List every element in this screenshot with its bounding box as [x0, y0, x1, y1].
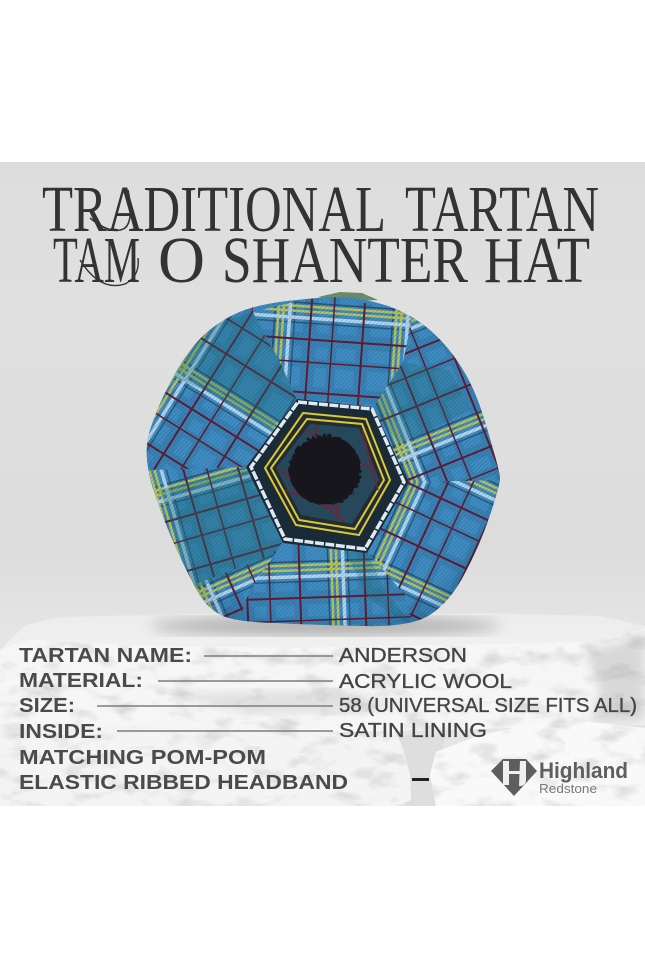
- spec labels: ELASTIC RIBBED HEADBAND: [19, 771, 348, 794]
- rock side shading: [585, 630, 645, 724]
- hat shadow: [150, 617, 500, 635]
- logo: Highland Redstone: [491, 758, 628, 796]
- title: [42, 173, 599, 297]
- logo: Highland Redstone: Redstone: [539, 781, 597, 796]
- logo: Highland Redstone: Highland: [539, 758, 628, 783]
- panel: upper left: [143, 300, 297, 470]
- panel: bottom teal shade: [345, 552, 410, 623]
- infographic canvas: [0, 162, 645, 806]
- panel: lower left: [140, 467, 283, 590]
- title: TRADITIONAL: [42, 173, 386, 246]
- gap between rocks: [395, 735, 445, 806]
- upper rock cliff: [0, 628, 645, 740]
- spec labels: SIZE:: [19, 694, 75, 717]
- hat edge shading: [140, 290, 505, 630]
- panel: top right: [373, 312, 505, 482]
- panel: lower left corner: [194, 542, 282, 621]
- tartan hat: [140, 290, 505, 630]
- back rim tip: [318, 292, 378, 302]
- grey backdrop panel: [0, 162, 645, 806]
- fabric weave: [140, 290, 505, 630]
- icon: H diamond: [491, 759, 537, 796]
- leader lines: [97, 656, 333, 731]
- panel: bottom: [239, 544, 431, 626]
- spec labels: MATERIAL:: [19, 669, 143, 692]
- rock top face: [0, 613, 645, 660]
- title: SHANTER: [222, 224, 468, 297]
- panel: top: [253, 295, 413, 408]
- panel: lower left teal shade: [160, 467, 283, 590]
- gap mark: [412, 778, 429, 781]
- spec values: 58 (UNIVERSAL SIZE FITS ALL): [339, 694, 637, 717]
- spec values: ANDERSON: [339, 644, 467, 667]
- panel: lower right: [367, 480, 505, 628]
- lower right rock: [430, 722, 645, 806]
- spec values: [339, 644, 637, 742]
- lower left rock: [0, 722, 411, 806]
- panel: upper left teal shade: [170, 312, 297, 430]
- spec labels: TARTAN NAME:: [19, 644, 192, 667]
- pom-pom: [289, 435, 361, 505]
- spec values: SATIN LINING: [339, 719, 487, 742]
- centre hexagon band: [246, 399, 408, 553]
- title: O: [158, 224, 205, 297]
- spec values: ACRYLIC WOOL: [339, 670, 512, 693]
- spec labels: MATCHING POM-POM: [19, 746, 266, 769]
- spec labels: INSIDE:: [19, 720, 103, 743]
- panel: top right teal shade: [373, 362, 470, 445]
- title: HAT: [484, 224, 590, 297]
- title: TAM: [53, 224, 140, 297]
- rock plinth: [0, 613, 645, 806]
- spec labels: [19, 644, 348, 794]
- rock ledge shading: [165, 690, 420, 714]
